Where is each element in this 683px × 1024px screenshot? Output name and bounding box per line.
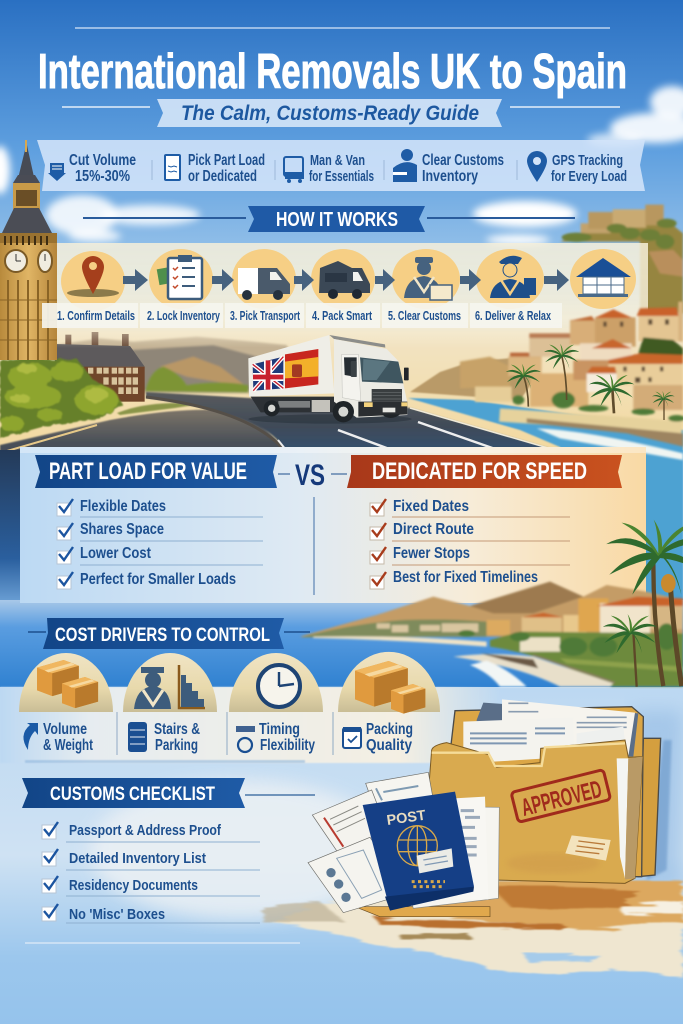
- dedicated list: Fewer Stops: [393, 545, 470, 562]
- dome: volume: [19, 653, 113, 712]
- dedicated ribbon: DEDICATED FOR SPEED: [372, 458, 587, 485]
- step labels: [42, 303, 562, 328]
- benefit: cut volume: [48, 152, 136, 185]
- truck with UK and Spain flags: [248, 335, 412, 424]
- road left: [0, 410, 285, 490]
- benefit: man and van: for Essentials: [309, 169, 374, 185]
- panel: cost drivers: [0, 652, 500, 763]
- benefit: clear customs: [393, 149, 504, 185]
- folder front: [428, 740, 643, 883]
- passport: POST: [386, 808, 427, 829]
- big ben: [0, 140, 57, 360]
- customs checklist: Residency Documents: [69, 877, 198, 894]
- sand: [262, 880, 683, 978]
- illustration: folder, passport and documents: [308, 699, 672, 917]
- coastal scene with palms: [300, 520, 683, 687]
- benefit: clear customs: Clear Customs: [422, 152, 504, 169]
- benefit: cut volume: Cut Volume: [69, 152, 136, 169]
- panel: how it works steps: [42, 243, 648, 348]
- dedicated ribbon: [347, 455, 622, 488]
- icon: white van: [238, 268, 290, 300]
- part load list: Lower Cost: [80, 545, 151, 562]
- cost drivers heading: [28, 618, 310, 649]
- flag: UK: [253, 357, 283, 391]
- cost label: volume and weight: & Weight: [43, 737, 93, 754]
- back folder: [450, 703, 661, 877]
- lower sea: [0, 600, 683, 690]
- approved stamp: APPROVED: [519, 776, 604, 822]
- cost label: timing flexibility: [236, 721, 315, 754]
- part load list: Shares Space: [80, 521, 164, 538]
- panel: part load vs dedicated: [20, 447, 646, 603]
- dome: stairs: [123, 653, 217, 712]
- flag: Spain: [285, 349, 318, 388]
- approved stamp: [511, 770, 611, 824]
- step labels: 5. Clear Customs: [388, 308, 461, 323]
- customs checklist heading: [22, 778, 315, 808]
- part load ribbon: PART LOAD FOR VALUE: [49, 458, 247, 485]
- papers: [463, 699, 635, 762]
- how it works heading: HOW IT WORKS: [276, 209, 398, 231]
- step labels: 3. Pick Transport: [230, 308, 300, 323]
- icon: house: [576, 258, 631, 297]
- step circles: [61, 249, 636, 311]
- water: [408, 398, 683, 610]
- how it works heading: [83, 206, 575, 232]
- cost label: packing quality: [343, 721, 413, 754]
- customs checklist heading: CUSTOMS CHECKLIST: [50, 784, 215, 805]
- icon: customs officer: [404, 257, 452, 300]
- dedicated list: Best for Fixed Timelines: [393, 569, 538, 586]
- truck chassis: [251, 397, 342, 412]
- cost label: volume and weight: Volume: [43, 721, 87, 738]
- cost label: packing quality: Packing: [366, 721, 413, 738]
- main road: [146, 392, 555, 450]
- customs checklist: [42, 822, 260, 923]
- part load list: [57, 498, 263, 589]
- spanish town: [460, 302, 683, 460]
- step labels: 6. Deliver & Relax: [475, 308, 552, 323]
- cost label: stairs and parking: Stairs &: [154, 721, 200, 738]
- benefit: gps tracking: GPS Tracking: [552, 152, 623, 169]
- flow arrows: [123, 269, 569, 291]
- benefit: clear customs: Inventory: [422, 168, 478, 185]
- icon: dark van: [319, 261, 370, 299]
- far mountains: [55, 337, 300, 393]
- cost label: volume and weight: [23, 721, 93, 754]
- benefit: cut volume: 15%-30%: [75, 168, 130, 185]
- step labels: 4. Pack Smart: [312, 308, 372, 323]
- part load ribbon: [35, 455, 277, 488]
- loose documents: [308, 772, 499, 917]
- benefit: man and van: [284, 153, 374, 185]
- dedicated list: Direct Route: [393, 521, 474, 538]
- subtitle ribbon: The Calm, Customs-Ready Guide: [181, 102, 479, 125]
- customs checklist: Detailed Inventory List: [69, 850, 206, 867]
- truck wheels: [264, 400, 400, 422]
- step labels: 2. Lock Inventory: [147, 308, 221, 323]
- part load list: Flexible Dates: [80, 498, 166, 515]
- dedicated list: [370, 498, 570, 589]
- versus label: VS: [295, 459, 325, 492]
- icon: clipboard: [157, 255, 202, 299]
- passport: [363, 792, 474, 911]
- cost label: stairs and parking: Parking: [155, 737, 198, 754]
- benefit: man and van: Man & Van: [310, 153, 365, 169]
- hill with castle: [560, 205, 683, 313]
- truck cab: [334, 339, 409, 418]
- step labels: 1. Confirm Details: [57, 308, 135, 323]
- benefit: pick part load: Pick Part Load: [188, 152, 265, 169]
- cost drivers heading: COST DRIVERS TO CONTROL: [55, 625, 270, 646]
- customs checklist: No 'Misc' Boxes: [69, 906, 165, 923]
- benefit: pick part load: or Dedicated: [188, 168, 257, 185]
- sticky note: [565, 835, 611, 861]
- benefit: pick part load: [165, 152, 265, 185]
- dedicated list: Fixed Dates: [393, 498, 469, 515]
- truck box: [248, 335, 385, 397]
- foliage: [0, 358, 123, 438]
- dome: packing: [338, 652, 440, 714]
- cost label: timing flexibility: Flexibility: [260, 737, 315, 754]
- lower panel: [0, 687, 683, 1024]
- cost label: stairs and parking: [128, 721, 200, 754]
- subtitle ribbon: [62, 99, 620, 127]
- versus label: [278, 459, 347, 492]
- english manor: [55, 332, 145, 402]
- icon: location pin: [67, 256, 119, 297]
- benefit: gps tracking: for Every Load: [551, 168, 627, 185]
- benefit: gps tracking: [527, 151, 627, 185]
- icon: delivery driver: [490, 256, 536, 298]
- customs checklist: Passport & Address Proof: [69, 822, 222, 839]
- cost label: packing quality: Quality: [366, 737, 412, 754]
- benefits strip: [37, 140, 645, 191]
- cost label: timing flexibility: Timing: [259, 721, 300, 738]
- part load list: Perfect for Smaller Loads: [80, 571, 236, 588]
- dome: clock: [229, 653, 323, 712]
